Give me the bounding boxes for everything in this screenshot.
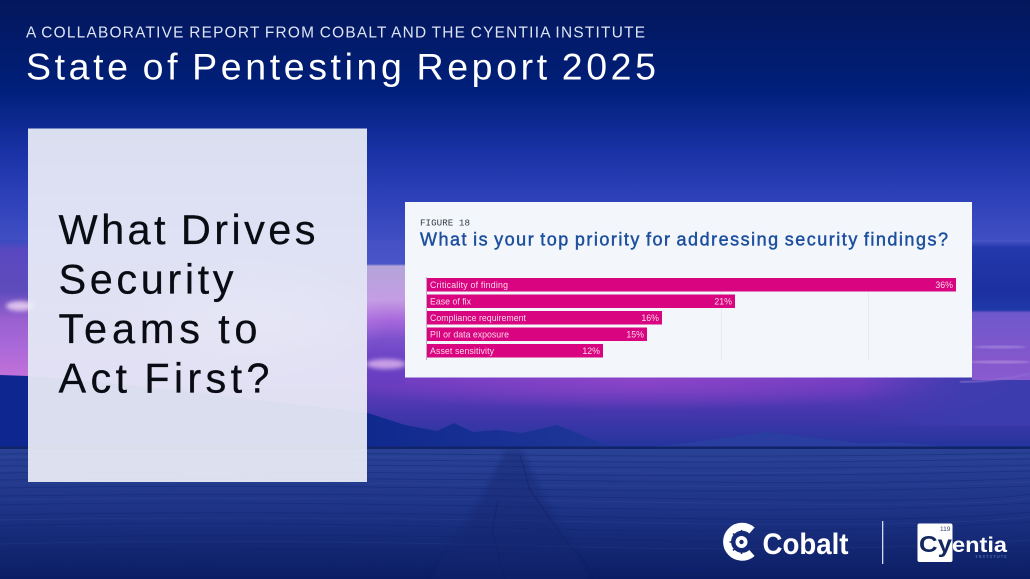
question heading: Act First?	[58, 354, 270, 402]
icon: Cobalt gear	[727, 527, 752, 557]
bar: compliance requirement 16%: Compliance requirement	[430, 313, 527, 323]
bar chart	[426, 277, 956, 360]
background: mountains	[0, 375, 958, 448]
bar: PII or data exposure 15%: PII or data exposure	[430, 329, 509, 339]
grid lines	[722, 290, 868, 360]
bar: asset sensitivity 12%	[427, 344, 603, 358]
wordmark: institute: INSTITUTE	[975, 554, 1007, 560]
logo: Cobalt	[727, 527, 849, 561]
report title: State of Pentesting Report 2025	[26, 46, 656, 88]
header	[26, 24, 656, 88]
question heading: Teams to	[58, 305, 258, 352]
wordmark: entia: entia	[952, 534, 1007, 557]
panel: question	[28, 128, 367, 482]
bar: ease of fix 21%: 21%	[714, 296, 732, 306]
background: clouds	[0, 240, 1030, 426]
element tile	[918, 524, 952, 562]
bar: PII or data exposure 15%	[427, 328, 647, 341]
question heading: What Drives	[58, 206, 316, 253]
bar: criticality of finding 36%: 36%	[935, 280, 953, 290]
bar: compliance requirement 16%	[427, 311, 662, 324]
wordmark: Cy: Cy	[919, 531, 952, 557]
logo: Cyentia Institute	[918, 524, 1007, 562]
panel: chart	[405, 202, 972, 378]
bar: ease of fix 21%	[427, 294, 735, 308]
chart title: What is your top priority for addressing security findings?	[420, 230, 948, 250]
eyebrow text: A COLLABORATIVE REPORT FROM COBALT AND THE CYENTIIA INSTITUTE	[26, 24, 645, 42]
bar: criticality of finding 36%	[427, 278, 956, 292]
bar: ease of fix 21%: Ease of fix	[430, 296, 472, 306]
bar: PII or data exposure 15%: 15%	[626, 329, 644, 339]
atomic number: 119	[940, 526, 951, 533]
question heading	[58, 206, 316, 402]
background: salt flat ground	[0, 446, 1030, 579]
bar: asset sensitivity 12%: Asset sensitivity	[430, 346, 495, 356]
question heading: Security	[58, 256, 234, 302]
bar: asset sensitivity 12%: 12%	[582, 346, 600, 356]
divider	[882, 521, 883, 564]
wordmark: Cobalt: Cobalt	[762, 528, 849, 561]
figure label: FIGURE 18	[420, 218, 470, 228]
bar: criticality of finding 36%: Criticality of finding	[430, 280, 508, 290]
bar: compliance requirement 16%: 16%	[641, 313, 659, 323]
background: twilight sky	[0, 0, 1030, 449]
